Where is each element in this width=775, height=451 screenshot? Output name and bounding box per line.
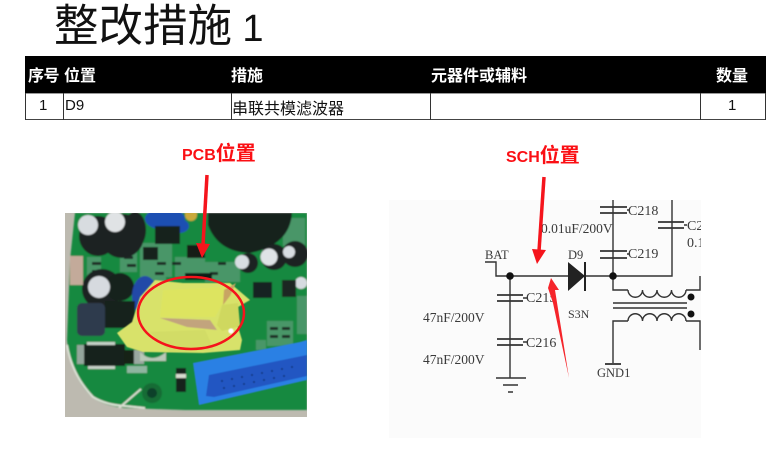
wires bbox=[485, 200, 672, 276]
dark coil bbox=[77, 303, 105, 336]
schematic labels: C219 bbox=[628, 247, 658, 262]
capacitor plates bbox=[497, 207, 684, 345]
header: measure: 措施 bbox=[231, 68, 263, 85]
table header row bbox=[25, 56, 766, 93]
copper pad left bbox=[70, 256, 83, 285]
PCB photo bbox=[65, 213, 307, 417]
GND1 bar bbox=[605, 363, 621, 365]
cell: D9: D9 bbox=[65, 97, 84, 114]
junctions and dots bbox=[506, 272, 694, 318]
label: SCH location: SCH位置 bbox=[506, 145, 580, 167]
black disc bbox=[208, 213, 292, 253]
header: components: 元器件或辅料 bbox=[431, 68, 527, 85]
arrow: diode line pointer bbox=[548, 278, 569, 378]
capacitors bbox=[79, 216, 117, 256]
transformer bbox=[613, 303, 687, 308]
diode D9 bbox=[568, 262, 585, 291]
schematic labels: BAT bbox=[485, 248, 509, 262]
ground bbox=[496, 378, 526, 392]
schematic labels: S3N bbox=[568, 307, 590, 321]
header: quantity: 数量 bbox=[716, 68, 748, 85]
yellow tape bbox=[117, 280, 250, 353]
header: location: 位置 bbox=[64, 68, 96, 85]
schematic labels: D9 bbox=[568, 248, 583, 262]
blue parts bbox=[145, 208, 185, 230]
label: PCB location: PCB位置 bbox=[182, 143, 256, 165]
schematic labels: C216 bbox=[526, 336, 556, 351]
cell: serial 1: 1 bbox=[39, 97, 47, 114]
schematic labels bbox=[423, 204, 704, 380]
component patches bbox=[87, 218, 307, 350]
schematic labels: C218 bbox=[628, 204, 658, 219]
schematic labels: 0.01uF/200V bbox=[541, 221, 613, 236]
schematic labels: 47nF/200V bbox=[423, 352, 485, 367]
arrow: PCB pointer bbox=[196, 174, 210, 258]
schematic labels: 47nF/200V bbox=[423, 310, 485, 325]
schematic labels: GND1 bbox=[597, 366, 630, 380]
cell: quantity 1: 1 bbox=[728, 97, 736, 114]
schematic diagram bbox=[423, 200, 701, 393]
title: 整改措施 1 bbox=[54, 2, 264, 51]
header: serial number: 序号 bbox=[28, 68, 59, 85]
blue connector bbox=[193, 340, 307, 405]
cell: measure text: 串联共模滤波器 bbox=[232, 101, 344, 118]
table: rectification measures bbox=[25, 56, 766, 120]
arrow: SCH pointer bbox=[532, 176, 546, 264]
schematic labels: C215 bbox=[526, 291, 556, 306]
red ellipse highlight bbox=[138, 277, 244, 349]
right capacitors bbox=[238, 253, 258, 273]
bottom black package bbox=[84, 344, 125, 366]
chips bbox=[155, 226, 180, 244]
